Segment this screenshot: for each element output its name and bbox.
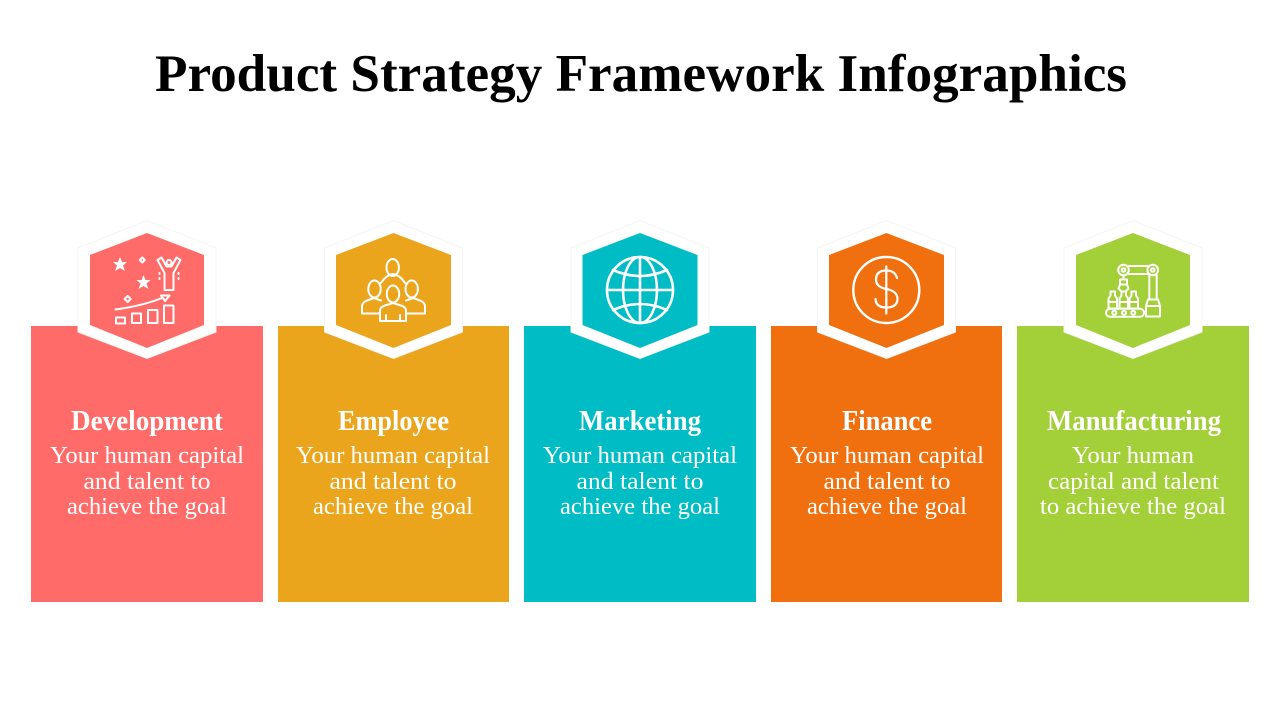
card: finance [771,326,1002,602]
text: marketing: achieve the goal [560,493,720,520]
icon: globe [607,257,673,323]
text: development: and talent to [84,468,210,495]
icon: growth chart with celebrating person [113,257,180,324]
panel: finance [771,220,1002,602]
card: manufacturing [1017,326,1249,602]
text: manufacturing: Your human [1072,442,1194,469]
text: employee [296,442,490,520]
hexagon: employee [324,220,462,358]
text: marketing [543,442,737,520]
heading: finance: Finance [842,406,932,437]
card: employee [278,326,509,602]
text: marketing: Your human capital [543,442,737,469]
text: finance: and talent to [824,468,950,495]
text: manufacturing: capital and talent [1048,468,1219,495]
panel: marketing [524,220,756,602]
text: finance [790,442,984,520]
text: employee: and talent to [330,468,456,495]
icon: robot arm and conveyor [1106,265,1160,317]
icon: team of people [362,259,425,321]
text: manufacturing [1040,442,1226,520]
heading: employee: Employee [338,406,449,437]
hexagon: development [78,220,216,358]
icon: dollar coin [853,257,919,323]
card: development [31,326,263,602]
panel: employee [278,220,509,602]
text: manufacturing: to achieve the goal [1040,493,1226,520]
text: marketing: and talent to [576,468,704,495]
text: employee: achieve the goal [313,493,473,520]
panel: manufacturing [1017,220,1249,602]
hexagon: marketing [571,220,709,358]
hexagon: manufacturing [1064,220,1202,358]
heading: manufacturing: Manufacturing [1047,406,1221,437]
card: marketing [524,326,756,602]
heading: development: Development [71,406,224,437]
title: Product Strategy Framework Infographics [155,45,1127,103]
text: finance: achieve the goal [807,493,967,520]
text: employee: Your human capital [296,442,490,469]
hexagon: finance [818,220,956,358]
text: development [50,442,244,520]
text: development: Your human capital [50,442,244,469]
panel: development [31,220,263,602]
text: finance: Your human capital [790,442,984,469]
heading: marketing: Marketing [579,406,701,437]
text: development: achieve the goal [67,493,227,520]
